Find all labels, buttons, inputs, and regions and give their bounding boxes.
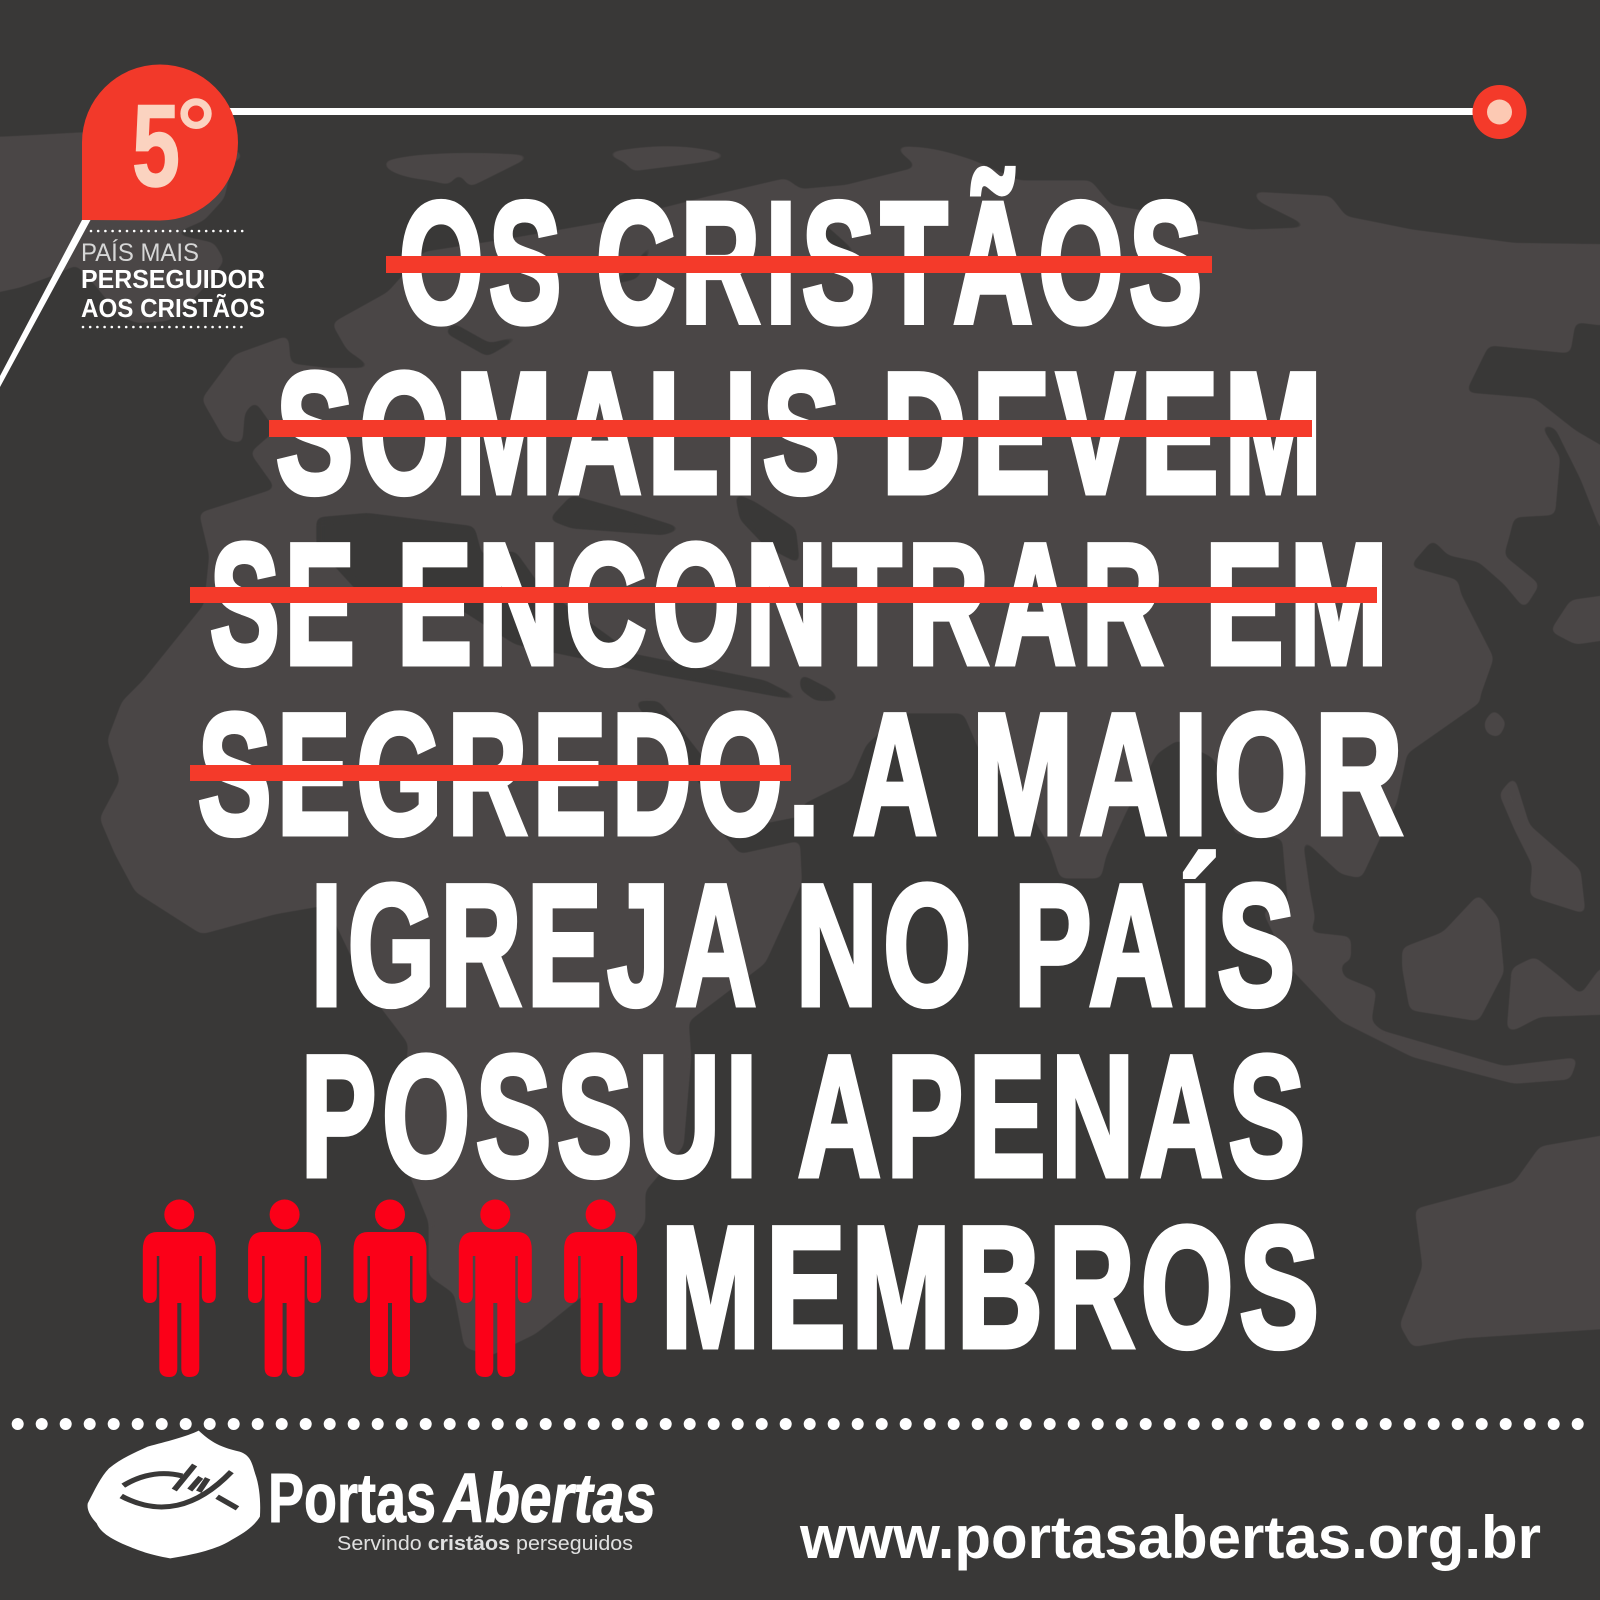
headline: NO: [796, 850, 977, 1042]
strikethrough bars: [190, 256, 1377, 781]
rank pin badge: [82, 65, 238, 221]
headline: EM: [1205, 508, 1394, 700]
headline: SOMALIS: [276, 338, 846, 530]
headline: OS: [399, 167, 567, 359]
rank caption: PAÍS MAIS: [81, 238, 199, 267]
rank caption: PERSEGUIDOR: [81, 264, 265, 294]
rank pin badge: °: [176, 78, 216, 190]
headline: [198, 167, 1409, 1384]
headline: A: [853, 678, 943, 870]
headline: ENCONTRAR: [397, 508, 1169, 700]
headline: MEMBROS: [661, 1192, 1325, 1384]
logo wordmark: Servindo cristãos perseguidos: [337, 1533, 633, 1555]
headline: SE: [210, 508, 360, 700]
logo emblem: fish on stone: [88, 1431, 260, 1558]
rank caption: [81, 231, 265, 327]
diagonal line from pin: [0, 220, 90, 387]
dotted divider: [18, 1418, 1596, 1430]
rank caption: AOS CRISTÃOS: [81, 293, 265, 323]
headline: POSSUI: [301, 1020, 763, 1212]
headline: PAÍS: [1014, 850, 1301, 1042]
logo wordmark: Portas: [268, 1459, 436, 1537]
headline: MAIOR: [972, 678, 1409, 870]
rank pin badge: 5: [132, 80, 180, 211]
logo wordmark: [268, 1459, 656, 1555]
website url: www.portasabertas.org.br: [799, 1504, 1541, 1571]
headline: CRISTÃOS: [596, 167, 1208, 359]
timeline end marker: [1472, 85, 1526, 139]
headline: IGREJA: [311, 850, 762, 1042]
headline: DEVEM: [882, 338, 1328, 530]
five member icons: [143, 1200, 637, 1377]
headline: APENAS: [798, 1020, 1311, 1212]
world map silhouette: [0, 132, 1600, 1356]
logo wordmark: Abertas: [442, 1459, 656, 1537]
top timeline line: [225, 108, 1485, 115]
headline: SEGREDO.: [198, 678, 825, 870]
